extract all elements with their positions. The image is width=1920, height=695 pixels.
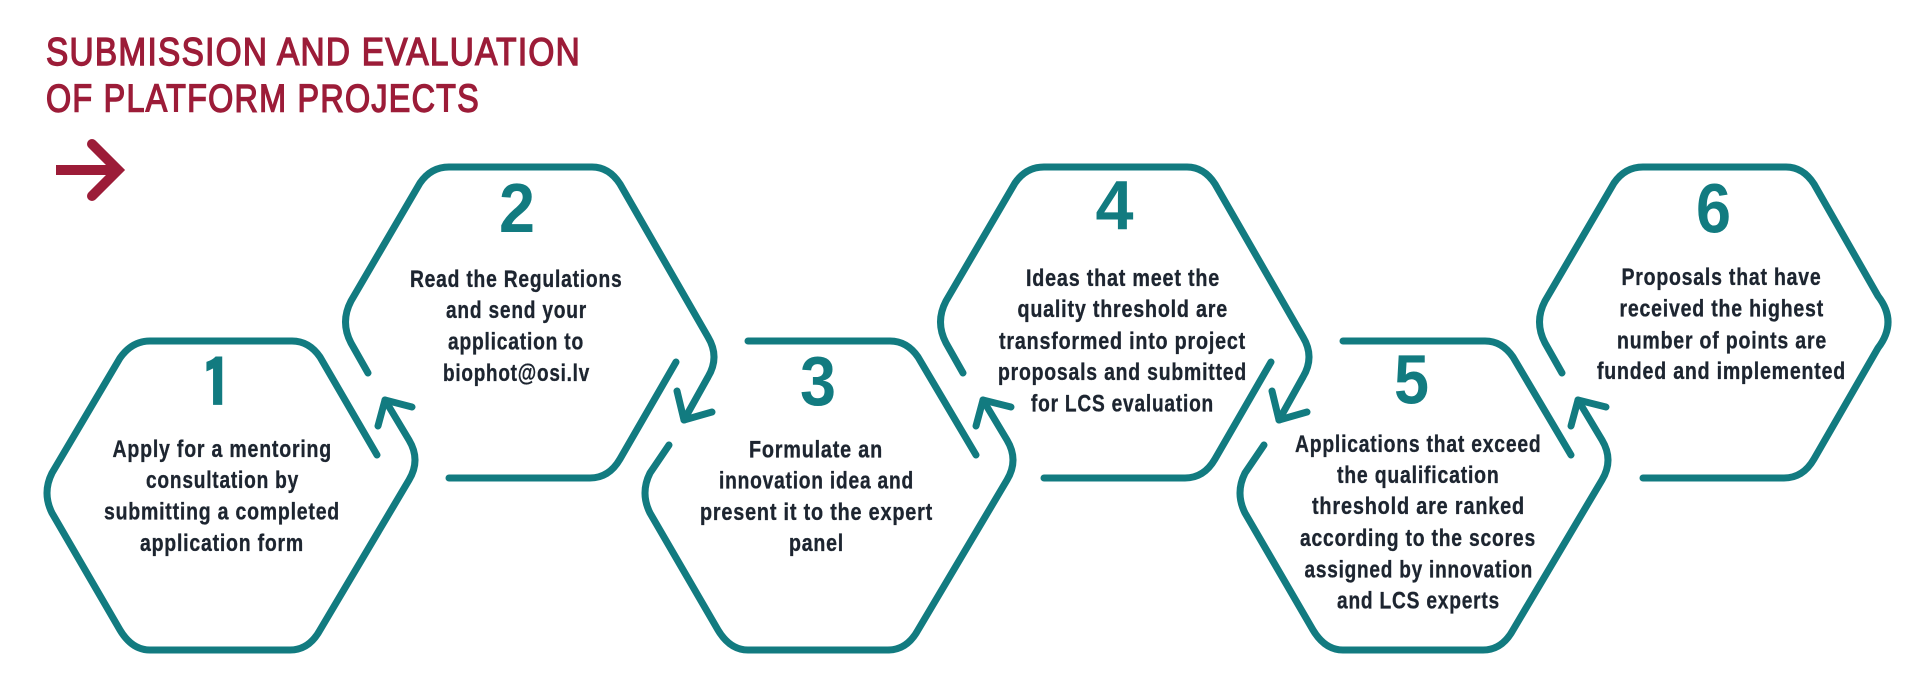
number 5: 5 — [1394, 340, 1429, 418]
hexagon 1 outline with arrow — [47, 341, 415, 650]
panel: step 1 — [47, 341, 415, 650]
step 5 description: the qualification — [1337, 462, 1500, 489]
step 3 description — [700, 436, 933, 557]
hexagon 3 outline with arrow — [645, 341, 1013, 650]
hexagon 5 outline with arrow — [1240, 341, 1608, 650]
step 5 description: and LCS experts — [1337, 588, 1500, 614]
number 2: 2 — [499, 169, 535, 247]
step 4 description: Ideas that meet the — [1026, 265, 1220, 292]
hexagon 4 outline with arrow — [940, 167, 1309, 478]
step 1 description: submitting a completed — [104, 498, 340, 526]
step 2 description — [410, 266, 622, 387]
step 5 description: according to the scores — [1300, 525, 1536, 552]
number 1: 1 — [201, 351, 232, 414]
step 1 description: consultation by — [146, 467, 299, 494]
panel: step 4 — [940, 166, 1309, 478]
step 1 description: Apply for a mentoring — [112, 436, 332, 463]
title — [46, 31, 581, 120]
step 6 description — [1597, 264, 1846, 385]
step 2 description: Read the Regulations — [410, 266, 622, 293]
step 6 description: Proposals that have — [1622, 264, 1822, 291]
step 3 description: innovation idea and — [719, 468, 914, 494]
step 5 description: threshold are ranked — [1312, 493, 1525, 520]
panel: step 3 — [645, 341, 1013, 650]
step 4 description: transformed into project — [999, 328, 1246, 355]
step 3 description: panel — [789, 530, 844, 557]
step 2 description: application to — [448, 328, 584, 356]
step 1 description: application form — [140, 530, 304, 557]
step 6 description: funded and implemented — [1597, 358, 1846, 385]
number 4: 4 — [1096, 166, 1134, 244]
step 4 description — [998, 265, 1247, 418]
number 6: 6 — [1696, 170, 1731, 248]
step 2 description: and send your — [446, 297, 587, 324]
hexagon 2 outline with arrow — [346, 167, 714, 478]
step 6 description: received the highest — [1620, 296, 1824, 322]
step 4 description: for LCS evaluation — [1031, 390, 1214, 418]
title: OF PLATFORM PROJECTS — [46, 78, 480, 120]
icon: red arrow — [56, 144, 118, 196]
step 1 description — [104, 436, 340, 557]
panel: step 2 — [346, 167, 714, 478]
step 3 description: present it to the expert — [700, 499, 933, 526]
panel: step 5 — [1240, 340, 1608, 650]
hexagon 6 outline — [1540, 167, 1888, 478]
number 3: 3 — [800, 342, 836, 420]
step 4 description: proposals and submitted — [998, 359, 1247, 386]
step 5 description: assigned by innovation — [1304, 556, 1533, 584]
step 2 description: biophot@osi.lv — [443, 360, 590, 387]
step 5 description: Applications that exceed — [1295, 431, 1542, 458]
step 4 description: quality threshold are — [1018, 296, 1228, 323]
panel: step 6 — [1540, 167, 1888, 478]
step 6 description: number of points are — [1617, 328, 1827, 354]
title: SUBMISSION AND EVALUATION — [46, 31, 581, 74]
step 3 description: Formulate an — [749, 436, 883, 464]
step 5 description — [1295, 431, 1542, 614]
